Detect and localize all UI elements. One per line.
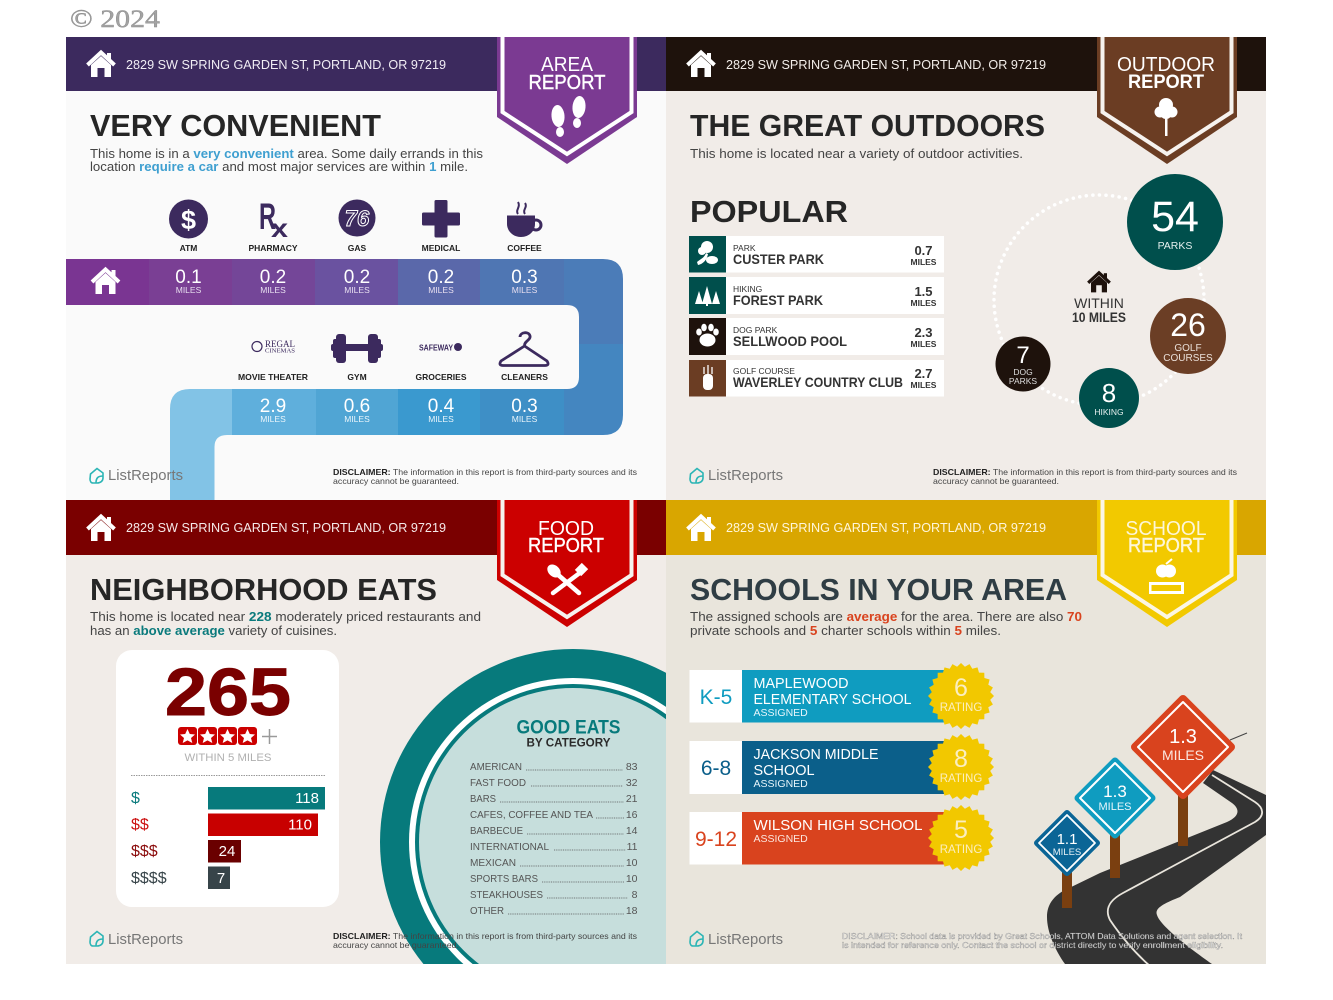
panel: area report (66, 37, 666, 500)
road illustration (1047, 733, 1266, 966)
center label: within 10 miles (1072, 273, 1126, 325)
price bar chart: $$$ (131, 843, 158, 860)
row: Sellwood Pool: SELLWOOD POOL (733, 333, 847, 349)
center label: within 10 miles: 10 MILES (1072, 309, 1126, 325)
school row: Maplewood: MAPLEWOOD (754, 675, 849, 692)
disclaimer: accuracy cannot be guaranteed. (333, 476, 459, 486)
badge: area report: REPORT (528, 72, 606, 94)
brand: ListReports: ListReports (708, 468, 783, 484)
brand: ListReports: ListReports (108, 932, 183, 948)
row: Custer Park (689, 236, 944, 272)
stop: gas (338, 200, 376, 295)
brand: ListReports: ListReports (708, 932, 783, 948)
row: Forest Park: FOREST PARK (733, 292, 823, 308)
school row: Maplewood: ASSIGNED (754, 707, 808, 719)
stop: ATM: $ (181, 205, 196, 235)
school row: Jackson: JACKSON MIDDLE (754, 746, 878, 763)
intro text: school: private schools and 5 charter schools within 5 miles. (690, 624, 1001, 638)
category list: STEAKHOUSES (470, 889, 543, 901)
school row: Maplewood: K-5 (700, 686, 732, 709)
stop: groceries: SAFEWAY (419, 342, 453, 352)
price bar chart: $$ (131, 816, 149, 834)
title: neighborhood eats: NEIGHBORHOOD EATS (90, 572, 437, 607)
school row: Jackson: 6-8 (701, 757, 731, 780)
category list: 16 (626, 809, 638, 821)
road sign: 1.1 miles: 1.1 (1057, 831, 1077, 848)
rating badge: 6 (928, 663, 994, 729)
price bar chart (131, 787, 325, 889)
stop: gym: 0.6 (344, 396, 370, 417)
row: Custer Park: CUSTER PARK (733, 251, 824, 267)
icon: spoon and fork (545, 562, 585, 593)
category list: 32 (626, 777, 638, 789)
stop: coffee: 0.3 (511, 267, 538, 288)
stop: groceries (415, 342, 467, 424)
icon: apple on books (1149, 559, 1184, 594)
stop: coffee (507, 202, 542, 295)
distance path band (66, 259, 624, 500)
category list: BARBECUE (470, 825, 523, 837)
badge: school report: SCHOOL (1126, 518, 1206, 540)
price bar chart: 24 (219, 843, 235, 860)
row: Sellwood Pool: DOG PARK (733, 325, 778, 335)
road sign: 1.3 miles red (1135, 699, 1231, 846)
row: Waverley Country Club (689, 360, 944, 396)
stop: cleaners: CLEANERS (501, 372, 548, 382)
stop: pharmacy (248, 196, 298, 295)
title: the great outdoors: THE GREAT OUTDOORS (690, 108, 1045, 143)
rating badge: 5: 5 (954, 816, 968, 844)
stop: movie theater (238, 339, 308, 424)
icon: footprints (551, 95, 586, 137)
disclaimer: DISCLAIMER: The information in this report is from third-party sources and its (333, 931, 637, 941)
stop: gas: MILES (344, 285, 370, 295)
badge: food report: REPORT (528, 535, 604, 557)
disclaimer (333, 931, 637, 950)
heading: popular: POPULAR (690, 194, 848, 229)
stop: gym: MILES (344, 414, 370, 424)
stop: ATM: ATM (180, 243, 197, 253)
stop: groceries: 0.4 (428, 396, 455, 417)
stop: medical: MILES (428, 285, 454, 295)
price bar chart: $$$$ (131, 870, 167, 887)
row: Forest Park: HIKING (733, 284, 762, 294)
header bar: food: 2829 SW SPRING GARDEN ST, PORTLAND, OR 97219 (126, 520, 446, 535)
badge: outdoor report (1097, 37, 1237, 164)
road sign: 1.3 miles blue: 1.3 (1103, 782, 1127, 801)
stop: coffee: COFFEE (507, 243, 542, 253)
school row: Maplewood: ELEMENTARY SCHOOL (754, 691, 912, 708)
category list (470, 718, 638, 917)
disclaimer (333, 467, 637, 486)
bubble: parks: PARKS (1158, 240, 1192, 252)
header bar: area: 2829 SW SPRING GARDEN ST, PORTLAND, OR 97219 (126, 57, 446, 72)
stop: movie theater: CINEMAS (265, 348, 295, 354)
badge: area report: AREA (541, 54, 594, 76)
stop: medical (422, 200, 460, 295)
big number 265: 265 (165, 655, 291, 730)
road sign: 1.3 miles blue: MILES (1098, 801, 1132, 813)
category list: BY CATEGORY (526, 738, 611, 750)
school row: Wilson: WILSON HIGH SCHOOL (754, 817, 922, 834)
badge: outdoor report: REPORT (1128, 72, 1204, 93)
stop: medical: 0.2 (428, 267, 454, 288)
price bar chart: 118 (295, 790, 319, 807)
category list: OTHER (470, 905, 504, 917)
row: Custer Park: 0.7 (914, 243, 933, 258)
category list: BARS (470, 793, 496, 805)
category list: GOOD EATS (516, 718, 620, 738)
category list: SPORTS BARS (470, 873, 538, 885)
bubble: dog parks: DOG (1013, 367, 1033, 377)
title: very convenient: VERY CONVENIENT (90, 108, 381, 143)
row: Custer Park: MILES (911, 257, 937, 267)
stop: pharmacy: 0.2 (260, 267, 286, 288)
center label: within 10 miles: WITHIN (1074, 295, 1124, 311)
category list: FAST FOOD (470, 777, 526, 789)
row: Forest Park (689, 277, 944, 314)
category list: 11 (627, 841, 638, 853)
category list: AMERICAN (470, 761, 522, 773)
panel: school report (666, 500, 1266, 966)
disclaimer: DISCLAIMER: The information in this report is from third-party sources and its (333, 467, 637, 477)
stop: groceries: GROCERIES (415, 372, 467, 382)
intro text: area (90, 147, 483, 174)
bubble: golf courses (1150, 298, 1226, 374)
disclaimer (933, 467, 1237, 486)
stop: medical: MEDICAL (422, 243, 460, 253)
copyright stamp: © 2024 (70, 6, 161, 33)
school row: Wilson: ASSIGNED (754, 833, 808, 845)
row: Forest Park: 1.5 (914, 284, 933, 299)
row: Waverley Country Club: 2.7 (914, 366, 933, 381)
stop: movie theater: MILES (260, 414, 286, 424)
bubble: parks: 54 (1151, 193, 1199, 241)
bubble: golf courses: GOLF (1174, 343, 1202, 354)
intro text: food: has an above average variety of cuisines. (90, 624, 337, 638)
stop: cleaners (500, 333, 548, 424)
panel: food report (66, 500, 666, 964)
category list: CAFES, COFFEE AND TEA (470, 809, 593, 821)
badge: area report (497, 37, 637, 164)
intro text: school (690, 610, 1082, 638)
school row: Wilson: 9-12 (695, 828, 737, 851)
rating badge: 5 (928, 805, 994, 871)
category list: 21 (626, 793, 638, 805)
row: Waverley Country Club: MILES (911, 380, 937, 390)
rating badge: 6: RATING (940, 702, 982, 714)
stop: pharmacy: PHARMACY (248, 243, 298, 253)
dotted radius ring (994, 195, 1204, 405)
bubble: golf courses: COURSES (1163, 353, 1213, 364)
row: Sellwood Pool (689, 318, 944, 355)
intro text: outdoor: This home is located near a variety of outdoor activities. (690, 147, 1023, 161)
intro text: food (90, 610, 481, 638)
price bar chart: 7 (217, 870, 225, 887)
stop: movie theater: MOVIE THEATER (238, 372, 308, 382)
card: restaurant count: WITHIN 5 MILES (184, 752, 272, 764)
category list: 10 (626, 857, 638, 869)
intro text: area: location require a car and most major services are within 1 mile. (90, 160, 468, 174)
icon: tree (1154, 98, 1178, 136)
school row: Wilson (690, 805, 994, 871)
bubble: dog parks (996, 336, 1050, 392)
intro text: school: The assigned schools are average for the area. There are also 70 (690, 610, 1082, 624)
bubble: dog parks: 7 (1016, 342, 1030, 369)
school row: Jackson: ASSIGNED (754, 778, 808, 790)
bubble: hiking: HIKING (1094, 407, 1124, 417)
stop: movie theater: 2.9 (260, 396, 286, 417)
bubble: parks (1127, 174, 1223, 270)
header bar: food (66, 500, 666, 555)
row: Waverley Country Club: WAVERLEY COUNTRY CLUB (733, 374, 903, 390)
badge: food report: FOOD (538, 518, 594, 540)
header bar: school: 2829 SW SPRING GARDEN ST, PORTLAND, OR 97219 (726, 520, 1046, 535)
road sign: 1.3 miles red: 1.3 (1169, 726, 1197, 748)
category list: 10 (626, 873, 638, 885)
rating badge: 8: 8 (954, 745, 968, 773)
header bar: outdoor (666, 37, 1266, 91)
stop: gas: 0.2 (344, 267, 370, 288)
road sign: 1.3 miles blue (1078, 761, 1152, 878)
stop: gym: GYM (347, 372, 367, 382)
disclaimer: accuracy cannot be guaranteed. (333, 940, 459, 950)
row: Sellwood Pool: MILES (911, 339, 937, 349)
stop: cleaners: MILES (512, 414, 538, 424)
category list: INTERNATIONAL (470, 841, 549, 853)
price bar chart: 110 (288, 816, 312, 834)
road sign: 1.3 miles red: MILES (1162, 747, 1204, 763)
disclaimer: accuracy cannot be guaranteed. (933, 476, 1059, 486)
stop: ATM: MILES (176, 285, 202, 295)
rating badge: 5: RATING (940, 844, 982, 856)
intro text: area: This home is in a very convenient area. Some daily errands in this (90, 147, 483, 161)
disclaimer: school: DISCLAIMER: School data is provided by Great Schools, ATTOM Data Solutions and agent selection. It (842, 931, 1243, 941)
disclaimer: school (842, 931, 1243, 950)
category list: 8 (632, 889, 638, 901)
rating badge: 6: 6 (954, 674, 968, 702)
school row: Maplewood (690, 663, 994, 729)
brand: ListReports: ListReports (108, 468, 183, 484)
bubble: hiking (1079, 368, 1139, 428)
row: Sellwood Pool: 2.3 (914, 325, 933, 340)
bubble: hiking: 8 (1102, 378, 1116, 408)
row: Forest Park: MILES (911, 298, 937, 308)
header bar: school (666, 500, 1266, 555)
road sign: 1.1 miles (1037, 813, 1097, 908)
category list: 83 (626, 761, 638, 773)
road sign: 1.1 miles: MILES (1053, 847, 1081, 858)
disclaimer: DISCLAIMER: The information in this report is from third-party sources and its (933, 467, 1237, 477)
stop: gas: 76 (345, 206, 370, 231)
row: Custer Park: PARK (733, 243, 756, 253)
stop: pharmacy: R (259, 196, 276, 237)
price bar chart: $ (131, 790, 140, 807)
icon: home on path (92, 270, 119, 294)
badge: outdoor report: OUTDOOR (1117, 54, 1215, 76)
badge: school report (1097, 500, 1237, 627)
stop: pharmacy: MILES (260, 285, 286, 295)
bubble: dog parks: PARKS (1009, 376, 1037, 386)
category list: MEXICAN (470, 857, 516, 869)
card: restaurant count (116, 650, 339, 907)
stop: coffee: MILES (512, 285, 538, 295)
intro text: food: This home is located near 228 moderately priced restaurants and (90, 610, 481, 624)
header bar: outdoor: 2829 SW SPRING GARDEN ST, PORTLAND, OR 97219 (726, 57, 1046, 72)
stop: cleaners: 0.3 (511, 396, 538, 417)
good eats circle (380, 649, 666, 964)
stop: ATM (169, 200, 208, 295)
badge: food report (497, 500, 637, 627)
badge: school report: REPORT (1128, 535, 1204, 557)
rating badge: 8: RATING (940, 773, 982, 785)
stop: pharmacy: x (271, 213, 289, 243)
stop: gas: GAS (348, 243, 367, 253)
rating badge: 8 (928, 734, 994, 800)
stop: groceries: MILES (428, 414, 454, 424)
row: Waverley Country Club: GOLF COURSE (733, 366, 795, 376)
category list: 14 (626, 825, 638, 837)
school row: Jackson: SCHOOL (754, 762, 814, 779)
stop: movie theater: REGAL (265, 339, 295, 349)
panel: outdoor report (666, 37, 1266, 500)
bubble: golf courses: 26 (1170, 307, 1206, 343)
stop: gym (331, 334, 383, 424)
rating stars (178, 727, 277, 745)
stop: ATM: 0.1 (175, 267, 202, 288)
title: schools in your area: SCHOOLS IN YOUR AREA (690, 572, 1067, 607)
disclaimer: school: is intended for reference only. Contact the school or district directly to verify enrollment eligibility. (842, 940, 1223, 950)
school row: Jackson (690, 734, 994, 800)
category list: 18 (626, 905, 638, 917)
header bar: area (66, 37, 666, 91)
